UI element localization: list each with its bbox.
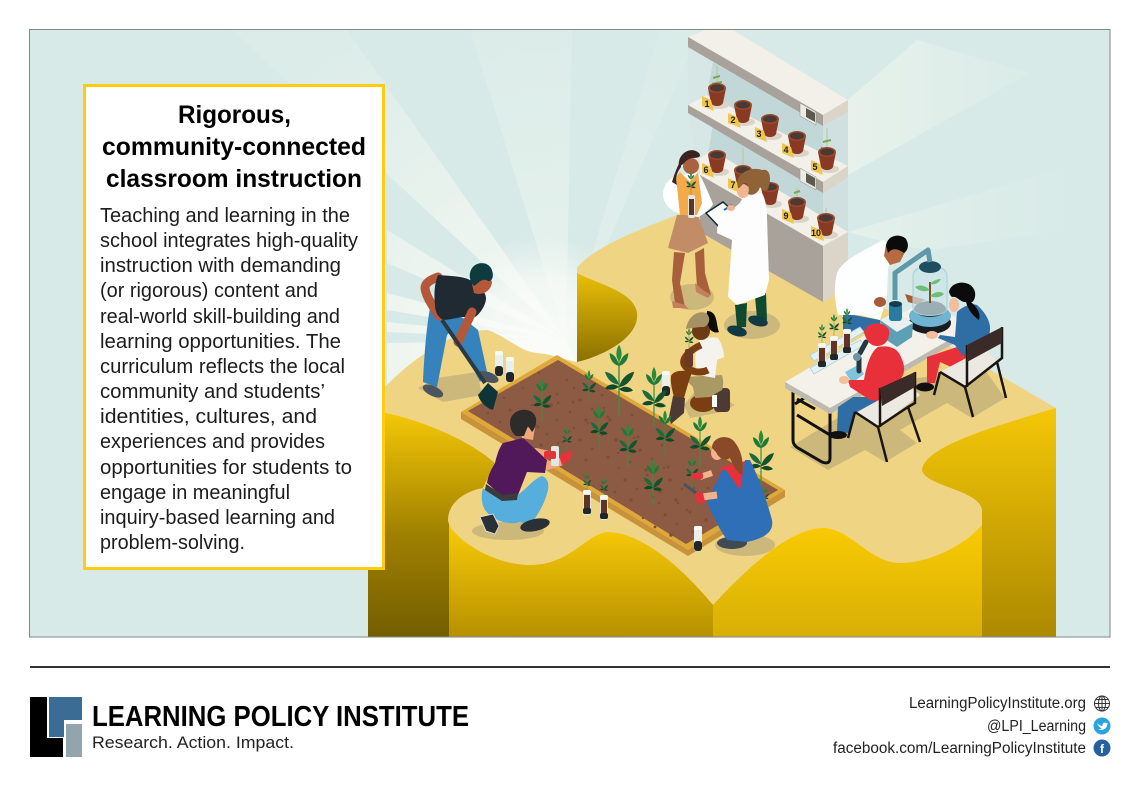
chair front [848,372,920,462]
red shirt [712,460,755,493]
panel body text: inquiry-based learning and [100,507,335,529]
student: kneeling with seedling [662,311,730,424]
panel heading [102,101,366,193]
terrarium [895,250,951,334]
panel body text: problem-solving. [100,532,245,554]
hair [737,169,770,195]
panel body text: engage in meaningful [100,482,290,504]
belt [485,484,518,501]
panel body text: community and students’ [100,381,325,403]
panel body text: real-world skill-building and [100,306,340,328]
platform sand top [368,205,1056,605]
number tags: 5 [812,162,818,172]
plants in the garden bed [533,345,774,506]
number tags [702,96,824,241]
lab instrument box [880,301,913,347]
number tags: 3 [756,129,762,139]
text panel [84,86,384,568]
control panels [800,103,816,190]
floating platform [368,205,1056,637]
ponytail [706,311,719,333]
number tags: 4 [783,145,789,155]
front leg and boot [669,371,692,424]
panel body text [100,205,358,554]
purple shirt [487,438,547,497]
neck [521,427,535,440]
number tags: 9 [783,211,789,221]
pots [708,83,839,239]
shelf light wall [688,47,848,246]
coat [717,193,769,305]
organization name: LEARNING POLICY INSTITUTE [92,701,469,733]
icon: facebook: f [1100,742,1105,756]
table legs [793,392,830,463]
green trousers [735,293,767,327]
rear leg and boot [690,388,730,412]
light blue trousers [482,476,548,525]
panel body text: Teaching and learning in the [100,205,350,227]
platform gold sides [368,405,1056,637]
lab table area [785,236,1006,463]
right arm [458,312,472,342]
sweater [848,346,904,402]
skirt [668,215,708,253]
face [949,298,959,312]
hand [839,376,849,384]
shoes [421,369,500,400]
panel body text: opportunities for students to [100,457,352,479]
panel body text: experiences and provides [100,431,325,453]
arms [536,452,560,468]
number tags: 7 [730,180,736,190]
jeans [423,308,487,387]
hair [510,410,536,436]
footer rule [30,666,1110,668]
scientist [835,236,926,333]
microscope [845,342,866,383]
contact: facebook: facebook.com/LearningPolicyInstitute [833,740,1086,757]
face and hair [711,437,743,475]
panel body text: school integrates high-quality [100,230,358,252]
table top [785,300,972,414]
panel body text: curriculum reflects the local [100,356,345,378]
clipboard [706,202,735,229]
LPI logo mark [30,697,82,757]
shoes [726,314,769,338]
student: digging with shovel [421,263,500,410]
shoe [916,382,934,392]
shelving unit with pots [688,30,848,302]
panel body text: learning opportunities. The [100,331,341,353]
vest [676,172,702,215]
student: standing with seedling [663,150,713,309]
hands [874,294,926,307]
seedlings in pots [712,66,833,218]
panel body text: (or rigorous) content and [100,280,318,302]
arms [684,345,708,372]
seedling rack [810,308,864,374]
face [884,244,906,265]
face [692,322,710,340]
shovel [442,320,498,410]
face [737,184,749,198]
student in blue [916,283,990,392]
contact: website: LearningPolicyInstitute.org [909,695,1086,712]
teacher: lab coat with clipboard [717,193,769,338]
trousers [843,313,880,333]
number tags: 1 [704,99,710,109]
contact: twitter: @LPI_Learning [987,718,1086,735]
icon: facebook [1094,740,1110,756]
heels [672,283,711,309]
coat [835,240,892,320]
icon: globe [1094,696,1110,711]
cap [686,312,709,329]
sleeve [718,202,745,239]
pen [724,205,732,210]
tube with plant [686,172,696,218]
chair back right [934,327,1006,417]
clipboard and teacher head [706,169,770,239]
garden bed [461,355,785,556]
number tags: 2 [730,115,736,125]
shoes [480,514,551,534]
arms and gloves [684,473,717,504]
number tags: 6 [703,165,709,175]
soil texture [487,372,759,537]
tube and gloves [544,427,572,466]
shoe [829,431,847,439]
platform gold notch [577,273,637,362]
head [672,150,700,185]
torso [434,275,486,320]
blue top [938,304,990,355]
red trousers [927,347,988,383]
head [470,263,493,294]
hand [926,331,938,339]
shirt [695,337,724,378]
illustration frame [30,30,1110,637]
student: red shirt and blue overalls [684,437,772,549]
held seedling [685,328,694,367]
icon: twitter [1094,718,1110,734]
number tags: 10 [811,228,821,238]
illustration background with light rays [30,30,1110,637]
legs [672,248,711,307]
panel heading: community-connected [102,133,366,161]
hair [886,236,908,253]
left arm [425,277,439,316]
floor shadows [418,284,1005,556]
shorts [683,375,723,398]
student: crouching at bed with purple shirt [480,410,572,534]
shelf top [688,30,848,126]
hair [949,283,980,320]
panel heading: classroom instruction [106,165,362,193]
student in red [829,323,904,439]
jeans [837,397,900,433]
panel body text: identities, cultures, and [100,406,317,428]
tagline: Research. Action. Impact. [92,733,294,752]
panel heading: Rigorous, [178,101,291,129]
nearby test tube [662,371,670,396]
overalls [707,460,772,542]
shelf base cabinet [700,150,848,302]
hair [864,323,889,346]
shelf middle [688,95,848,193]
blouse [663,172,713,217]
panel body text: instruction with demanding [100,255,341,277]
hand [727,205,735,211]
shoe [717,537,747,549]
test tubes on the ground [495,351,702,551]
